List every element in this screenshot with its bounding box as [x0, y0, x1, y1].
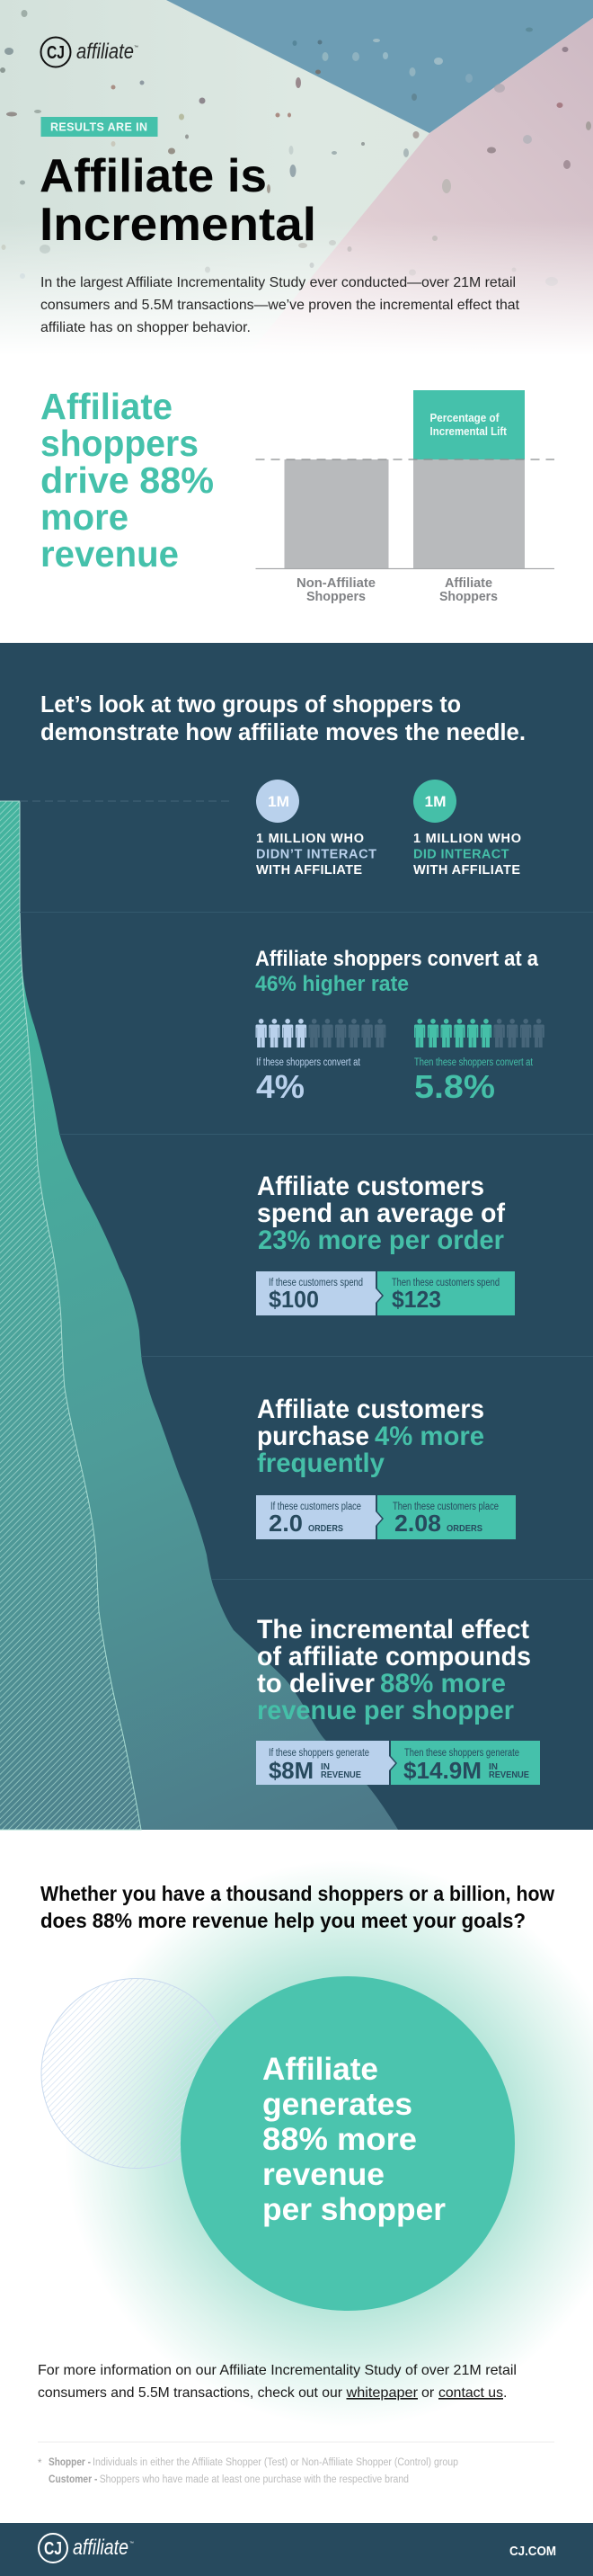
footer logo: ™: [129, 2541, 134, 2546]
big circle callout: Affiliate: [262, 2052, 378, 2087]
footnotes: Individuals in either the Affiliate Shopper (Test) or Non-Affiliate Shopper (Control) group: [93, 2457, 458, 2468]
footer logo: affiliate: [73, 2536, 128, 2560]
footer bar: [0, 2523, 593, 2576]
hero background photo: [0, 0, 593, 378]
group: did interact: DID INTERACT: [413, 847, 509, 861]
big circle callout: 88% more: [262, 2122, 417, 2157]
group: did not interact: DIDN’T INTERACT: [256, 847, 376, 861]
comparison boxes: spend: If these customers spend: [269, 1278, 363, 1288]
group: did not interact: 1M: [268, 793, 289, 810]
stat: conversion rate: 46% higher rate: [255, 972, 409, 996]
comparison boxes: revenue: $8M: [269, 1757, 314, 1784]
logo: CJ affiliate: affiliate: [76, 40, 134, 64]
stat: spend per order: [256, 1172, 515, 1315]
footer url: CJ.COM: [509, 2544, 556, 2559]
heading: affiliate shoppers drive 88% more revenue: more: [40, 496, 128, 538]
footnotes: Shopper -: [49, 2457, 91, 2468]
comparison boxes: revenue: REVENUE: [321, 1770, 361, 1780]
big circle callout: [181, 1976, 515, 2311]
footnotes: Customer -: [49, 2474, 98, 2485]
stat: revenue per shopper: to deliver: [257, 1669, 375, 1698]
comparison boxes: revenue: If these shoppers generate: [269, 1748, 369, 1759]
stat: purchase frequency: frequently: [257, 1448, 385, 1478]
group: did interact: 1M: [424, 793, 446, 810]
stat: conversion rate: Then these shoppers convert at: [414, 1057, 534, 1068]
comparison boxes: revenue: Then these shoppers generate: [404, 1748, 519, 1759]
group: did not interact: [256, 780, 376, 878]
stat: spend per order: spend an average of: [257, 1199, 506, 1228]
decorative wave: [0, 801, 398, 1830]
stat: purchase frequency: purchase: [257, 1422, 369, 1451]
heading: affiliate shoppers drive 88% more revenue: revenue: [40, 533, 179, 575]
comparison boxes: orders: ORDERS: [447, 1524, 482, 1534]
stat: revenue per shopper: The incremental effect: [257, 1615, 529, 1645]
footer logo: CJ: [44, 2539, 62, 2559]
icon: people row affiliate: [414, 1019, 544, 1047]
stat: conversion rate: Affiliate shoppers convert at a: [255, 947, 538, 971]
footer logo: [39, 2534, 134, 2563]
big circle callout: generates: [262, 2087, 412, 2122]
stat: conversion rate: 5.8%: [414, 1068, 495, 1105]
tag: results are in: [41, 117, 158, 137]
background glow: [65, 1860, 593, 2427]
stat: purchase frequency: [256, 1395, 516, 1539]
stat: revenue per shopper: [256, 1615, 540, 1785]
title: [40, 150, 316, 251]
logo: CJ affiliate: CJ: [47, 43, 65, 63]
stat: spend per order: 23% more per order: [258, 1226, 504, 1255]
group: did interact: [413, 780, 521, 878]
more information text: or: [421, 2385, 435, 2401]
comparison boxes: revenue: [256, 1741, 540, 1785]
question heading: does 88% more revenue help you meet your goals?: [40, 1909, 526, 1932]
panel: two groups comparison: [0, 643, 593, 1830]
comparison boxes: spend: Then these customers spend: [392, 1278, 500, 1288]
bar chart: Affiliate: [445, 575, 492, 591]
stat: spend per order: Affiliate customers: [257, 1172, 484, 1201]
stat: purchase frequency: Affiliate customers: [257, 1395, 484, 1424]
intro paragraph: In the largest Affiliate Incrementality Study ever conducted—over 21M retail: [40, 275, 516, 290]
comparison boxes: spend: [256, 1271, 515, 1315]
heading: two groups of shoppers: Let’s look at two groups of shoppers to: [40, 692, 461, 718]
stat: conversion rate: If these shoppers convert at: [256, 1057, 361, 1068]
bar chart: Incremental Lift: [429, 425, 508, 438]
panel: hero: [0, 0, 593, 378]
logo: CJ affiliate: ™: [134, 45, 138, 50]
comparison boxes: revenue: $14.9M: [403, 1757, 482, 1784]
comparison boxes: orders: Then these customers place: [393, 1502, 499, 1512]
panel: revenue lift: [40, 386, 554, 604]
footnotes: *: [38, 2458, 42, 2469]
group: did not interact: WITH AFFILIATE: [256, 863, 362, 878]
stat: conversion rate: [255, 947, 544, 1105]
bar chart: Shoppers: [306, 589, 366, 604]
heading: affiliate shoppers drive 88% more revenue: drive 88%: [40, 459, 214, 501]
comparison boxes: revenue: IN: [321, 1762, 330, 1772]
more information text: .: [503, 2385, 507, 2401]
intro paragraph: consumers and 5.5M transactions—we’ve proven the incremental effect that: [40, 298, 520, 313]
more information text: contact us: [438, 2385, 503, 2401]
comparison boxes: revenue: IN: [489, 1762, 498, 1772]
stat: revenue per shopper: revenue per shopper: [257, 1696, 514, 1725]
title: Incremental: [40, 199, 316, 251]
comparison boxes: revenue: REVENUE: [489, 1770, 529, 1780]
hatched circle: [41, 1978, 231, 2169]
stat: conversion rate: 4%: [256, 1068, 305, 1105]
more information text: whitepaper: [345, 2385, 419, 2401]
group: did not interact: 1 MILLION WHO: [256, 832, 364, 846]
intro paragraph: [40, 275, 520, 335]
bar chart: Non-Affiliate: [296, 575, 376, 591]
more information text: [38, 2363, 517, 2401]
bar chart: Shoppers: [439, 589, 498, 604]
heading: two groups of shoppers: demonstrate how affiliate moves the needle.: [40, 720, 526, 745]
heading: two groups of shoppers: [40, 692, 526, 745]
more information text: consumers and 5.5M transactions, check out our: [38, 2385, 343, 2401]
stat: revenue per shopper: of affiliate compounds: [257, 1642, 531, 1671]
more information text: For more information on our Affiliate Incrementality Study of over 21M retail: [38, 2363, 517, 2378]
stat: revenue per shopper: 88% more: [380, 1669, 506, 1698]
intro paragraph: affiliate has on shopper behavior.: [40, 320, 251, 335]
comparison boxes: orders: 2.08: [394, 1510, 441, 1537]
footnotes: Shoppers who have made at least one purchase with the respective brand: [100, 2474, 409, 2485]
heading: affiliate shoppers drive 88% more revenue: shoppers: [40, 423, 199, 464]
group: did interact: 1 MILLION WHO: [413, 832, 521, 846]
heading: affiliate shoppers drive 88% more revenue: [40, 386, 214, 575]
icon: people row non-affiliate: [255, 1019, 385, 1047]
question heading: Whether you have a thousand shoppers or a billion, how: [40, 1882, 554, 1905]
tag: results are in: RESULTS ARE IN: [50, 120, 147, 133]
big circle callout: per shopper: [262, 2192, 446, 2227]
title: Affiliate is: [40, 150, 267, 202]
logo: CJ affiliate: [41, 38, 138, 67]
comparison boxes: orders: 2.0: [269, 1510, 303, 1537]
question heading: [40, 1882, 554, 1932]
stat: purchase frequency: 4% more: [375, 1422, 484, 1451]
big circle callout: revenue: [262, 2157, 385, 2192]
comparison boxes: spend: $123: [392, 1286, 441, 1313]
bar chart: Percentage of: [429, 412, 500, 424]
heading: affiliate shoppers drive 88% more revenue: Affiliate: [40, 386, 173, 427]
bar chart: [255, 390, 554, 604]
group: did interact: WITH AFFILIATE: [413, 863, 520, 878]
comparison boxes: orders: ORDERS: [308, 1524, 343, 1534]
panel: goals: [40, 1860, 593, 2427]
comparison boxes: orders: If these customers place: [270, 1502, 361, 1512]
comparison boxes: orders: [256, 1495, 516, 1539]
footnotes: [38, 2457, 458, 2485]
comparison boxes: spend: $100: [269, 1286, 319, 1313]
